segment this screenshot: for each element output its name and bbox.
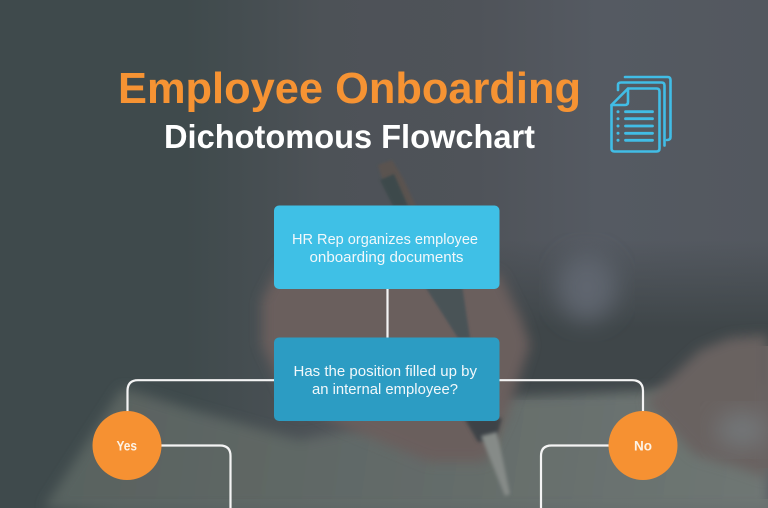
box: question: an internal employee? (312, 381, 458, 398)
circle: No: No (634, 438, 652, 454)
box: question: Has the position filled up by (294, 363, 477, 380)
connector: Yes downward (160, 446, 230, 508)
connector: question to No (499, 380, 643, 412)
pen (378, 160, 510, 496)
circle: Yes: Yes (116, 438, 137, 454)
writing hand (262, 240, 530, 462)
icon: stacked documents (612, 77, 670, 152)
box: HR Rep organizes documents: HR Rep organizes employee (292, 231, 478, 248)
connector: No downward (541, 446, 610, 508)
circle: No (608, 411, 678, 480)
connector: question to Yes (128, 380, 274, 412)
box: HR Rep organizes documents (274, 206, 500, 289)
resting hand (645, 335, 768, 478)
subtitle: Dichotomous Flowchart (164, 118, 535, 155)
title: Employee Onboarding (118, 64, 581, 113)
box: HR Rep organizes documents: onboarding documents (310, 249, 464, 266)
box: question (274, 338, 500, 421)
connector: first box to question (386, 289, 389, 338)
circle: Yes (92, 411, 162, 480)
paper (44, 385, 768, 508)
